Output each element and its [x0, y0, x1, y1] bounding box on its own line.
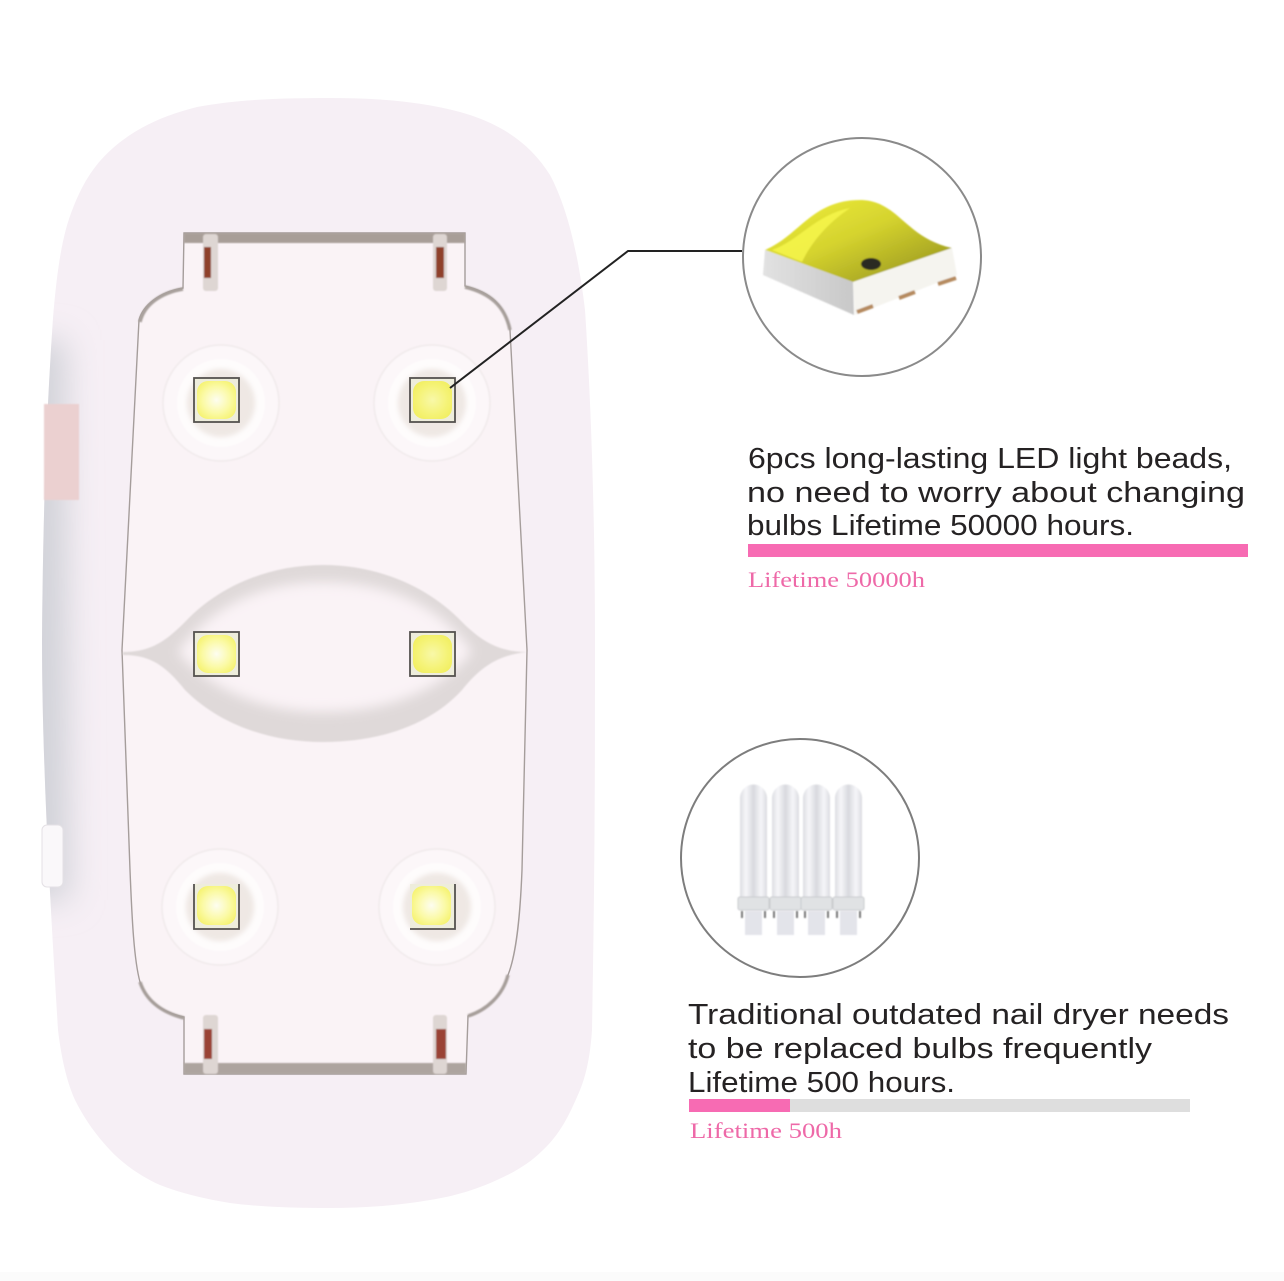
lamp body [42, 98, 595, 1208]
text: traditional dryer description [688, 999, 1229, 1099]
bar: traditional lifetime 500h [689, 1099, 1190, 1112]
text: LED lifetime description: bulbs Lifetime 50000 hours. [747, 510, 1134, 542]
LED bead 4 [410, 632, 455, 676]
bottom faint strip [0, 1272, 1284, 1281]
label: lifetime 50000h: Lifetime 50000h [748, 567, 925, 592]
LED bead 3 [194, 632, 239, 676]
nail lamp device [10, 98, 595, 1208]
text: traditional dryer description: to be replaced bulbs frequently [688, 1033, 1153, 1065]
right tab notch top [433, 234, 447, 291]
LED socket bottom left [162, 849, 278, 965]
bottom slot band [184, 1063, 466, 1074]
right tab notch bottom [433, 1015, 447, 1074]
text: LED lifetime description: 6pcs long-lasting LED light beads, [748, 443, 1232, 475]
icon: UV tube bulbs [738, 784, 864, 935]
left tab notch bottom [203, 1015, 218, 1074]
circle: LED bead close-up [743, 138, 981, 376]
LED socket top left [163, 345, 279, 461]
LED bead 5 [194, 884, 239, 929]
text: LED lifetime description: no need to worry about changing [747, 477, 1245, 509]
text: traditional dryer description: Traditional outdated nail dryer needs [688, 999, 1229, 1031]
text: LED lifetime description [747, 443, 1245, 542]
bar: LED lifetime 50000h [748, 544, 1248, 557]
LED bead 6 [410, 884, 455, 929]
power port [44, 404, 79, 500]
label: lifetime 500h: Lifetime 500h [690, 1118, 842, 1143]
callout leader line [450, 251, 742, 388]
circle: traditional bulbs [681, 739, 919, 977]
LED bead 1 [194, 378, 239, 422]
top slot band [184, 233, 465, 243]
panel corner shadows [140, 287, 510, 1018]
left side shading [42, 332, 81, 910]
text: traditional dryer description: Lifetime 500 hours. [688, 1067, 955, 1099]
icon: LED chip [763, 200, 957, 315]
left tab notch top [203, 234, 218, 291]
recessed panel [122, 233, 527, 1074]
LED socket top right [374, 345, 490, 461]
side switch [42, 825, 63, 887]
LED bead 2 [410, 378, 455, 422]
centre eye recess [123, 565, 527, 742]
LED socket bottom right [379, 849, 495, 965]
